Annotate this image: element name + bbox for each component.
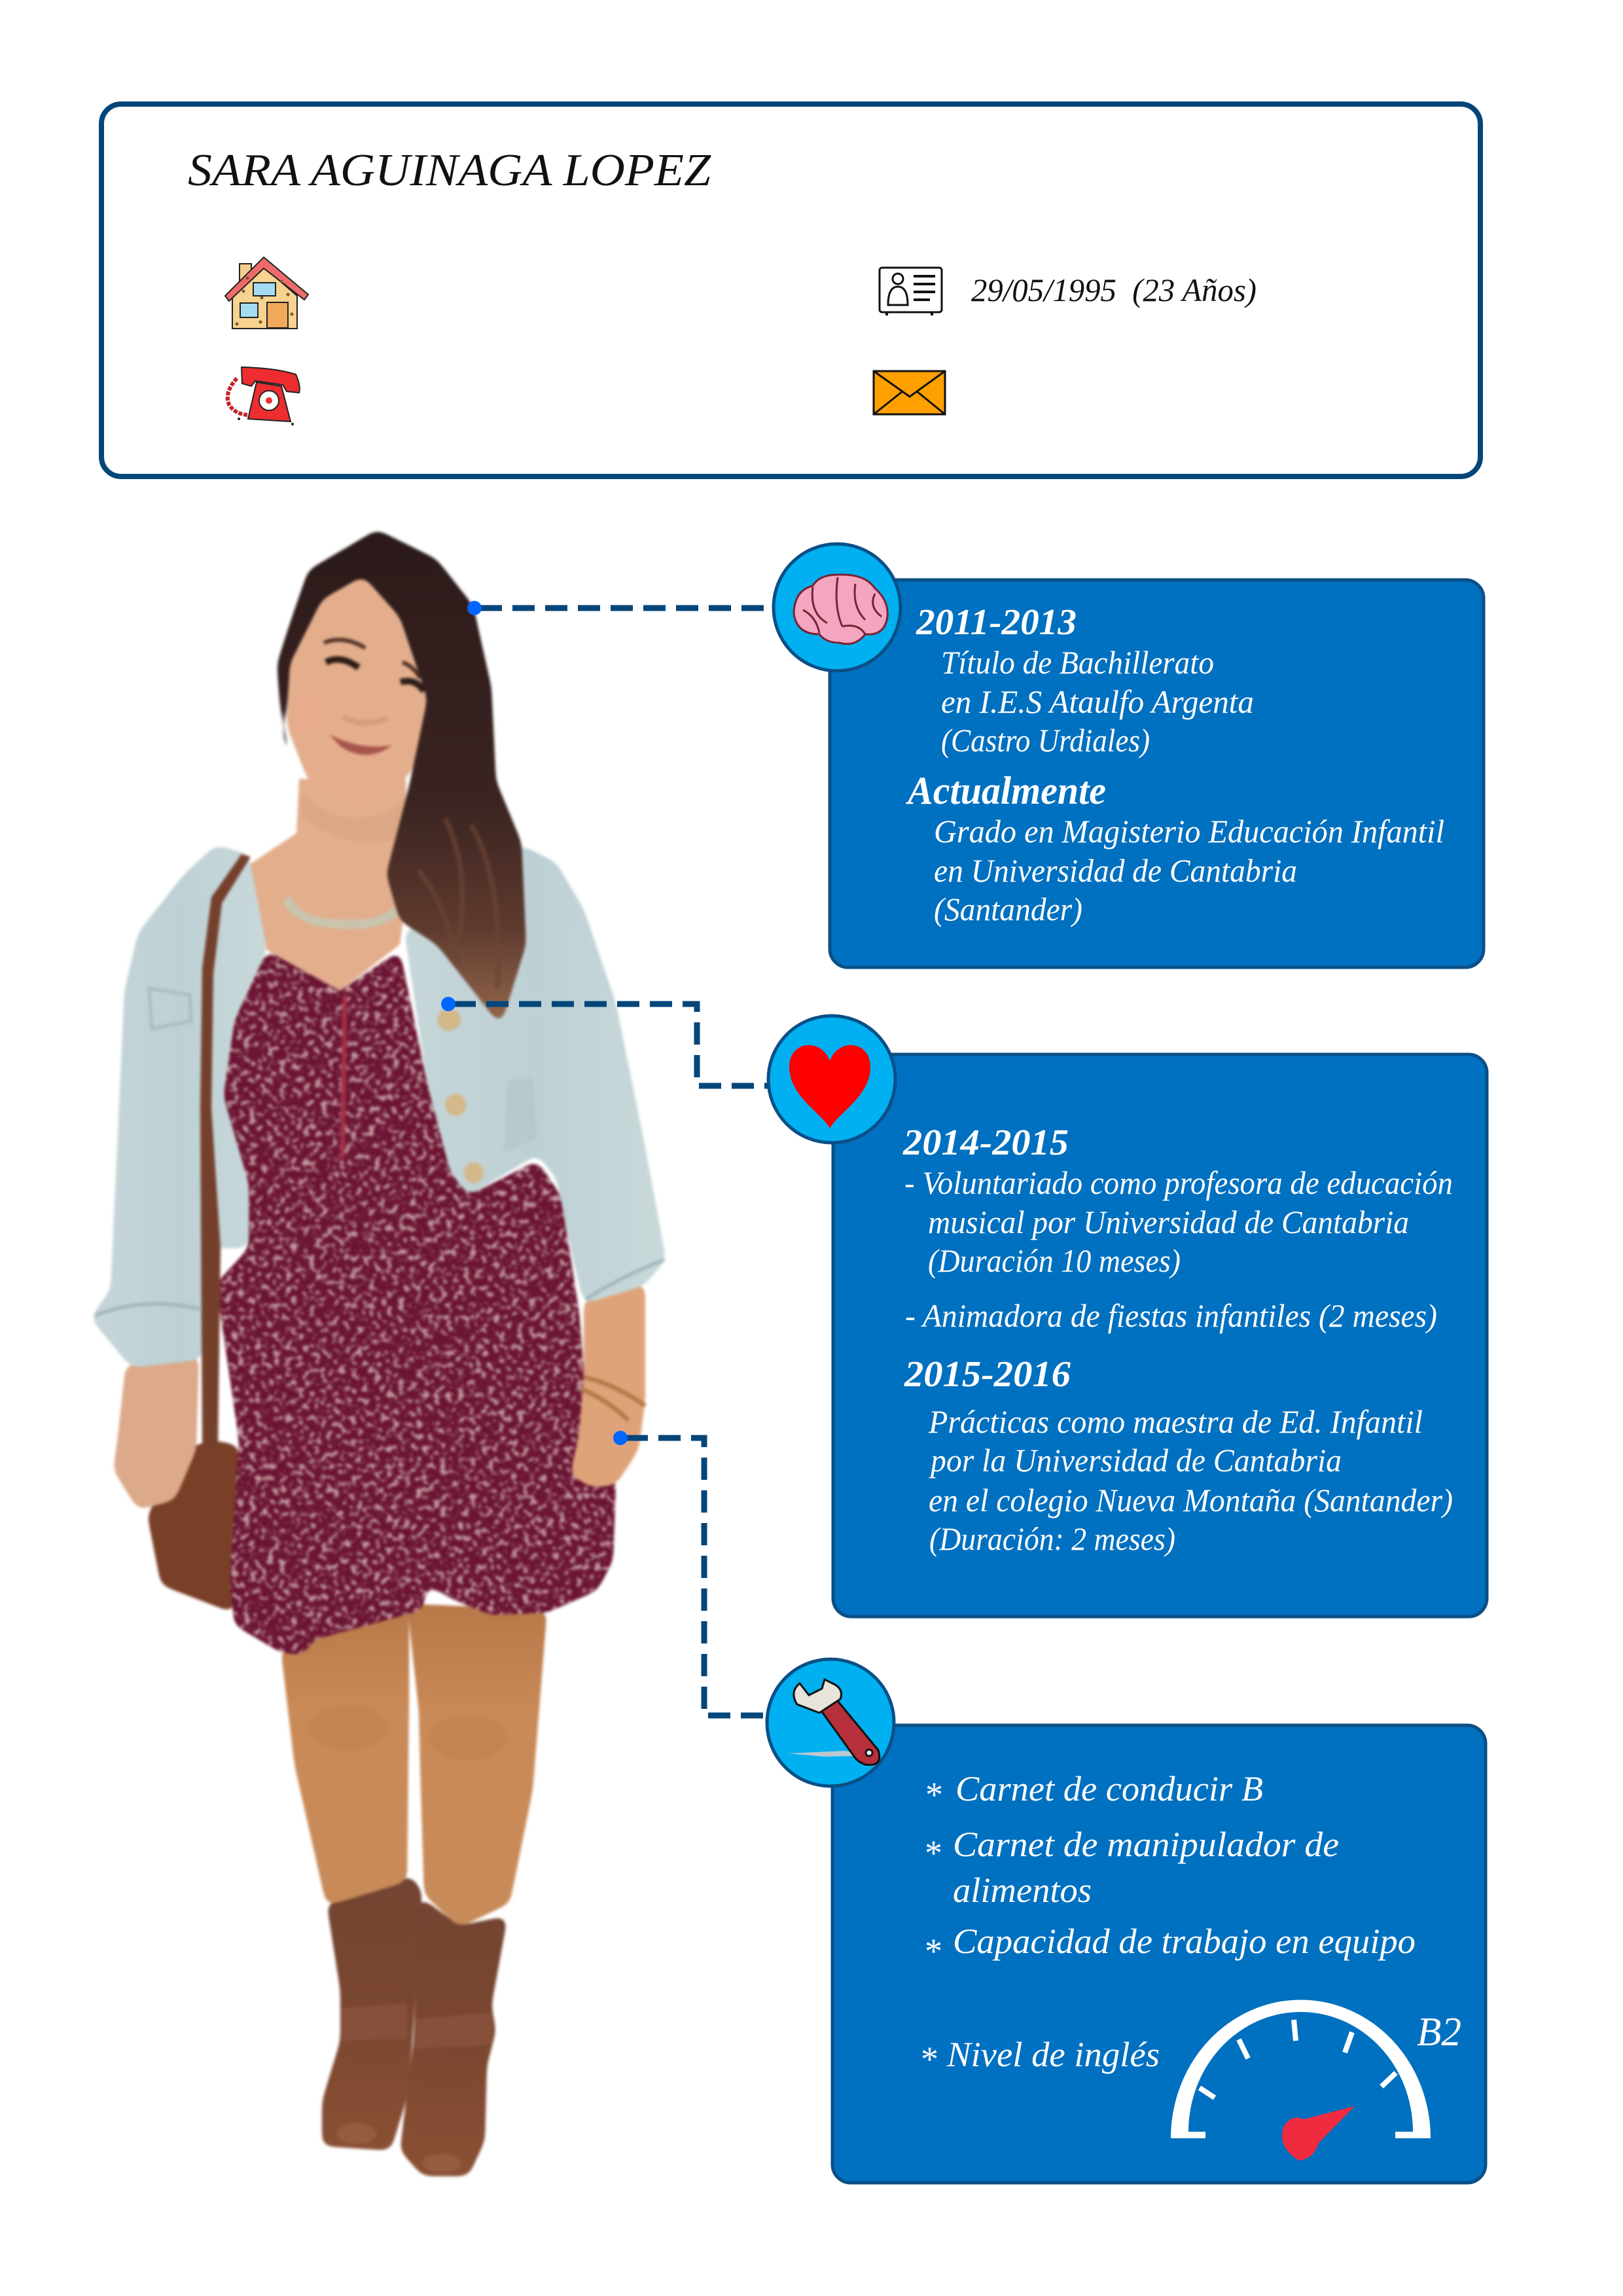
skills list: alimentos: [953, 1871, 1092, 1910]
panel: education: [774, 544, 1484, 967]
jacket left: [90, 845, 267, 1368]
left arm and hand: [113, 1355, 199, 1510]
experience text: musical por Universidad de Cantabria: [928, 1204, 1409, 1240]
boots: [322, 1876, 508, 2176]
icon: telephone: [228, 367, 300, 425]
face: [287, 573, 427, 810]
education text: 2011-2013: [916, 602, 1077, 643]
birth date text: 29/05/1995 (23 Años): [971, 272, 1257, 308]
education text: en Universidad de Cantabria: [934, 852, 1297, 889]
photo: woman standing: [90, 529, 666, 2176]
icon: envelope: [874, 371, 945, 414]
experience text: 2015-2016: [904, 1354, 1071, 1395]
header panel: [101, 104, 1480, 476]
name heading: SARA AGUINAGA LOPEZ: [188, 145, 711, 196]
connector: skills: [613, 1431, 766, 1715]
gauge needle: [1282, 2106, 1355, 2161]
icon circle: heart: [768, 1016, 895, 1143]
icon: id card: [880, 268, 942, 315]
education text: [905, 602, 1444, 927]
experience text: por la Universidad de Cantabria: [929, 1442, 1342, 1479]
icon circle: brain: [774, 544, 901, 671]
skills list: Capacidad de trabajo en equipo: [953, 1922, 1416, 1961]
icon circle: wrench: [767, 1659, 894, 1786]
hair: [277, 529, 526, 1026]
level label: B2: [1417, 2010, 1461, 2054]
experience text: en el colegio Nueva Montaña (Santander): [929, 1482, 1453, 1518]
connector: experience: [441, 997, 769, 1086]
dress: [216, 950, 616, 1655]
dress zip: [342, 995, 345, 1158]
panel: skills: [767, 1659, 1486, 2183]
skills list: *: [925, 1775, 943, 1814]
experience text: (Duración 10 meses): [928, 1242, 1181, 1279]
hair highlights: [419, 818, 499, 988]
education text: Título de Bachillerato: [941, 644, 1214, 681]
education text: en I.E.S Ataulfo Argenta: [941, 683, 1254, 720]
experience text: 2014-2015: [902, 1122, 1069, 1163]
gauge: English level: [1171, 2000, 1461, 2161]
bracelets: [581, 1377, 645, 1420]
education text: (Castro Urdiales): [941, 722, 1150, 759]
skills list: *: [921, 2039, 938, 2079]
handbag: [147, 1440, 239, 1613]
experience text: - Voluntariado como profesora de educación: [904, 1164, 1453, 1201]
education text: (Santander): [934, 891, 1082, 927]
experience text: (Duración: 2 meses): [929, 1520, 1175, 1557]
necklace: [287, 898, 398, 924]
connector: education: [467, 601, 779, 615]
legs: [281, 1604, 547, 1928]
neck shadow: [302, 795, 402, 843]
skills list: *: [925, 1931, 942, 1971]
panel: experience: [768, 1016, 1487, 1617]
experience text: Prácticas como maestra de Ed. Infantil: [928, 1403, 1423, 1440]
chest and neck: [243, 779, 409, 991]
experience text: [902, 1122, 1453, 1557]
education text: Grado en Magisterio Educación Infantil: [934, 813, 1444, 850]
skills list: Carnet de conducir B: [955, 1769, 1263, 1808]
right arm and hand: [570, 1283, 645, 1488]
education text: Actualmente: [905, 769, 1106, 812]
experience text: - Animadora de fiestas infantiles (2 meses): [905, 1297, 1437, 1334]
jacket buttons: [437, 1009, 484, 1183]
skills list: Nivel de inglés: [946, 2035, 1160, 2074]
skills list: Carnet de manipulador de: [953, 1825, 1339, 1864]
skills list: *: [925, 1833, 942, 1873]
jacket right: [404, 845, 666, 1304]
skills list: [921, 1769, 1416, 2079]
icon: house: [225, 257, 308, 329]
bag strap: [200, 854, 251, 1446]
